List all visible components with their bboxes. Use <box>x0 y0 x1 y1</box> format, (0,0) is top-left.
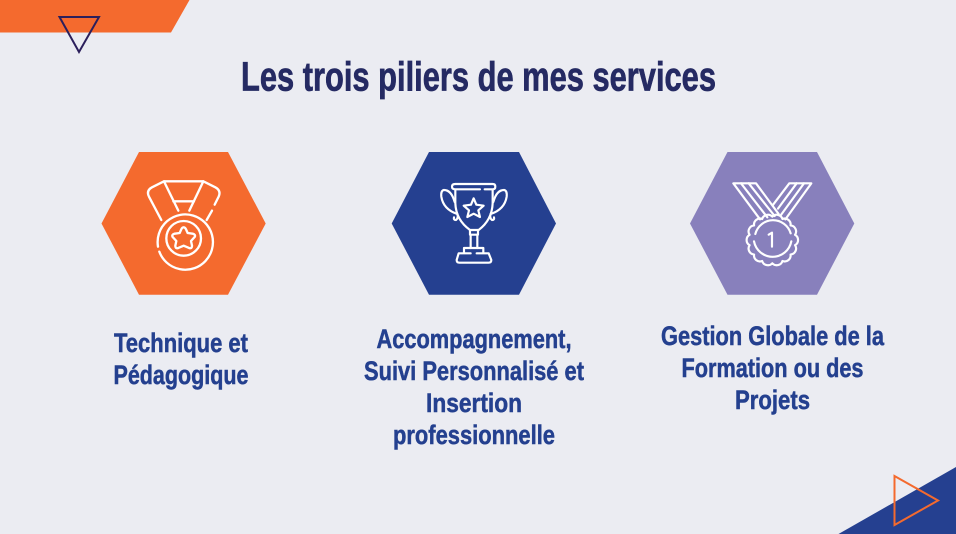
label: Insertion <box>426 388 522 418</box>
label <box>114 328 248 390</box>
pillar 2: accompagnement <box>364 152 584 450</box>
label: Suivi Personnalisé et <box>364 356 584 386</box>
top-left triangle outline <box>60 17 99 52</box>
label <box>661 321 884 415</box>
label: Pédagogique <box>114 360 248 390</box>
label: Formation ou des <box>682 353 864 383</box>
label: professionnelle <box>393 420 555 450</box>
top-left orange banner <box>0 0 190 32</box>
label: Accompagnement, <box>376 324 572 354</box>
hexagon: orange <box>102 152 266 295</box>
pillar 3: gestion globale <box>661 152 884 415</box>
label <box>364 324 584 450</box>
icon: medal number one <box>733 183 811 265</box>
pillar 1: technique <box>102 152 266 390</box>
bottom-right triangle outline <box>894 476 938 525</box>
label: Technique et <box>114 328 248 358</box>
title: Les trois piliers de mes services <box>241 54 716 100</box>
hexagon: blue <box>392 152 556 295</box>
hexagon: purple <box>690 152 854 295</box>
icon: trophy with star <box>441 184 507 263</box>
bottom-right blue corner <box>838 467 956 534</box>
label: Gestion Globale de la <box>661 321 884 351</box>
label: Projets <box>735 385 810 415</box>
icon: medal with star <box>148 181 219 270</box>
